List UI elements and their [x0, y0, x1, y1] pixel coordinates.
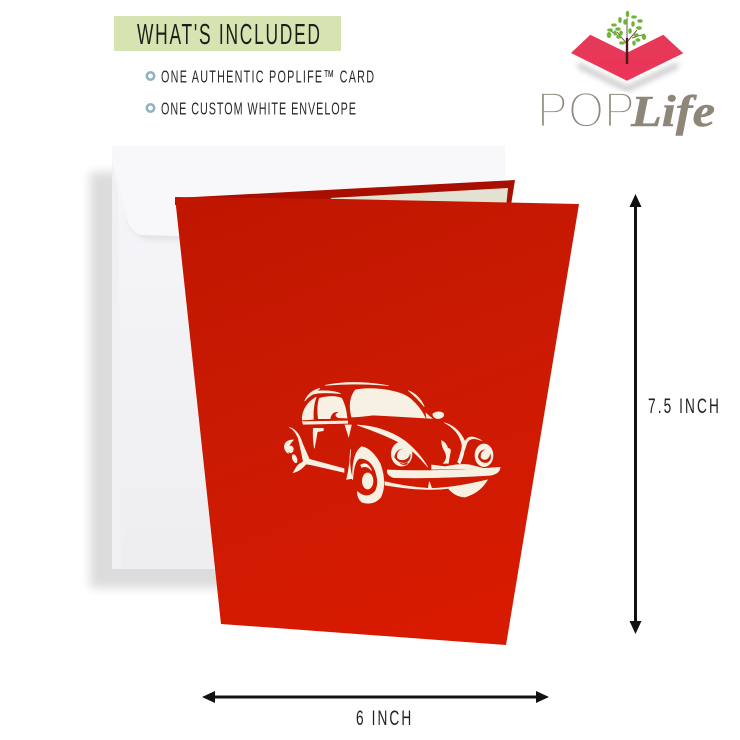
- car: rear roof stripe: [305, 388, 341, 401]
- car: hood emblem: [442, 438, 464, 464]
- car: rear wheel: [284, 440, 298, 463]
- car: hood line: [357, 425, 428, 467]
- width label: 6 INCH: [356, 706, 411, 730]
- car: front wheel hub: [361, 464, 373, 489]
- car: side window: [318, 396, 347, 419]
- car: hood edge and front fender: [444, 423, 482, 454]
- car: belt line: [302, 421, 348, 424]
- car: bumper: [387, 467, 500, 478]
- car: windshield: [350, 389, 425, 418]
- envelope flap shadow: [126, 215, 300, 242]
- poplife logo: [537, 11, 715, 138]
- car: a-pillar stripe: [408, 391, 424, 407]
- card: front cover: [175, 197, 579, 645]
- heading: what's included: WHAT'S INCLUDED: [137, 19, 320, 51]
- list of included items: [147, 68, 374, 119]
- car: roof: [325, 382, 389, 386]
- car: body sill: [289, 427, 344, 473]
- car: left headlight: [391, 442, 412, 466]
- card: cut-out car: [284, 382, 500, 503]
- item: envelope: ONE CUSTOM WHITE ENVELOPE: [161, 100, 356, 119]
- pop-up card: [175, 180, 579, 645]
- car: lower valance: [385, 480, 487, 497]
- card: inner cream page: [330, 188, 508, 203]
- height label: 7.5 INCH: [648, 394, 719, 418]
- car: right headlight: [475, 444, 493, 467]
- logo: red book: [571, 35, 683, 81]
- item: poplife card: ONE AUTHENTIC POPLIFE™ CARD: [161, 68, 374, 87]
- height dimension arrow: [630, 194, 642, 634]
- car: mirror: [426, 412, 444, 419]
- logo: book shadow: [578, 62, 678, 92]
- envelope flap: [112, 146, 505, 236]
- logo: wordmark: Life: [630, 87, 715, 136]
- car: fender line: [347, 449, 353, 479]
- logo: wordmark: [537, 82, 715, 138]
- envelope: [90, 146, 505, 588]
- envelope body: [112, 146, 505, 569]
- logo: tree: [607, 11, 646, 64]
- logo: wordmark: POP: [537, 82, 635, 138]
- car: door: [313, 425, 351, 448]
- width dimension arrow: [202, 691, 549, 703]
- car: rear window: [302, 397, 316, 420]
- car: grille base: [432, 464, 483, 469]
- car: front wheel: [353, 447, 384, 503]
- envelope shadow: [90, 172, 430, 588]
- card: back cover: [175, 180, 515, 205]
